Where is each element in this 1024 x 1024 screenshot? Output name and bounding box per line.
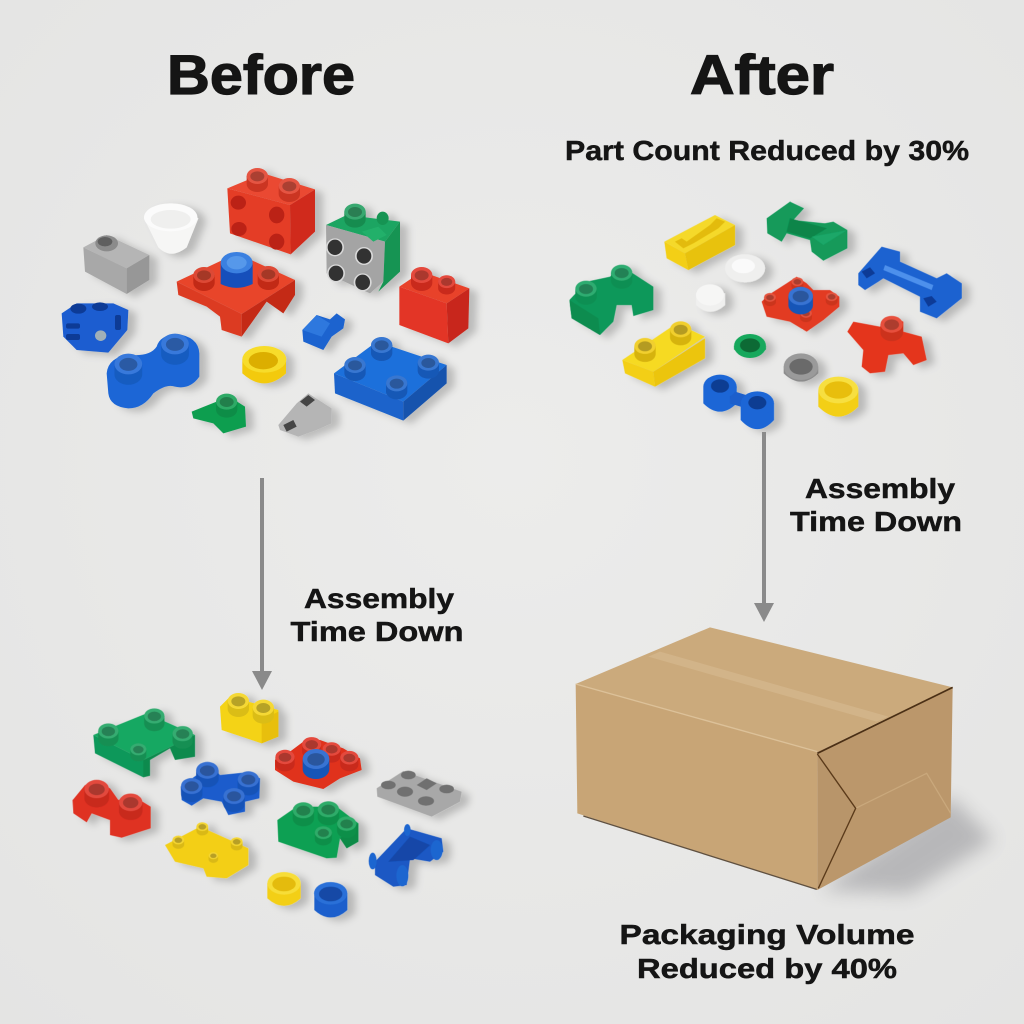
label: assembly time down (after): Time Down bbox=[790, 506, 962, 537]
part: blue plate bbox=[334, 337, 447, 421]
part: white cup bbox=[144, 203, 198, 254]
label: packaging volume bbox=[620, 919, 914, 984]
part: red cross with blue centre bbox=[762, 277, 839, 332]
part: blue small clip bbox=[302, 313, 345, 350]
part: blue link bbox=[107, 334, 199, 408]
label: assembly time down (before): Time Down bbox=[290, 616, 464, 647]
panel: assembled parts bbox=[73, 693, 462, 917]
part: red plate with blue tower bbox=[177, 252, 295, 337]
part: green H connector bbox=[767, 202, 847, 261]
label: assembly time down (before) bbox=[290, 583, 464, 647]
part: grey clip bbox=[278, 393, 332, 437]
part: white rings bbox=[696, 254, 765, 312]
part: green U brick bbox=[569, 265, 653, 335]
part: blue connector bbox=[62, 302, 128, 353]
icon: cardboard box bbox=[576, 627, 993, 893]
part: yellow ring bbox=[242, 346, 286, 383]
part: yellow brick bbox=[664, 215, 735, 270]
part: grey and green cube bbox=[326, 204, 400, 293]
part: red brick bbox=[227, 168, 315, 254]
part: blue link small bbox=[181, 762, 260, 815]
label: packaging volume: Packaging Volume bbox=[620, 919, 914, 950]
part: blue H bar bbox=[858, 247, 962, 318]
arrow: after down bbox=[754, 432, 774, 622]
part: red T shape bbox=[847, 316, 927, 373]
part: green plate small bbox=[277, 801, 358, 858]
part: green plate bbox=[93, 708, 195, 777]
arrow: before down bbox=[252, 478, 272, 690]
label: packaging volume: Reduced by 40% bbox=[637, 953, 897, 984]
part: yellow cylinder bbox=[818, 377, 858, 417]
part: green hook bbox=[192, 394, 246, 433]
part: blue dumbbell bbox=[703, 375, 774, 429]
part: yellow cylinder bbox=[267, 872, 301, 906]
label: assembly time down (after) bbox=[790, 473, 962, 537]
title: After: After bbox=[690, 43, 834, 106]
part: yellow brick bbox=[220, 693, 278, 743]
part: blue cylinder bbox=[314, 882, 347, 917]
part: grey perforated plate bbox=[377, 771, 462, 817]
part: grey block bbox=[83, 235, 149, 294]
panel: after parts cluster bbox=[569, 202, 962, 429]
panel: before parts cluster bbox=[62, 168, 469, 437]
part: red link bbox=[73, 780, 151, 838]
title: Before: Before bbox=[167, 43, 355, 106]
label: assembly time down (after): Assembly bbox=[805, 473, 955, 504]
part: blue axle frame bbox=[369, 824, 443, 887]
part: grey ring bbox=[784, 353, 818, 382]
part: yellow plate bbox=[165, 822, 248, 878]
label: assembly time down (before): Assembly bbox=[304, 583, 454, 614]
part: yellow plate bbox=[622, 321, 705, 387]
part: green ring bbox=[734, 334, 766, 358]
part: red block bbox=[399, 267, 469, 343]
part: red flower with blue centre bbox=[275, 737, 362, 789]
label: part count reduced: Part Count Reduced by 30% bbox=[565, 135, 969, 166]
